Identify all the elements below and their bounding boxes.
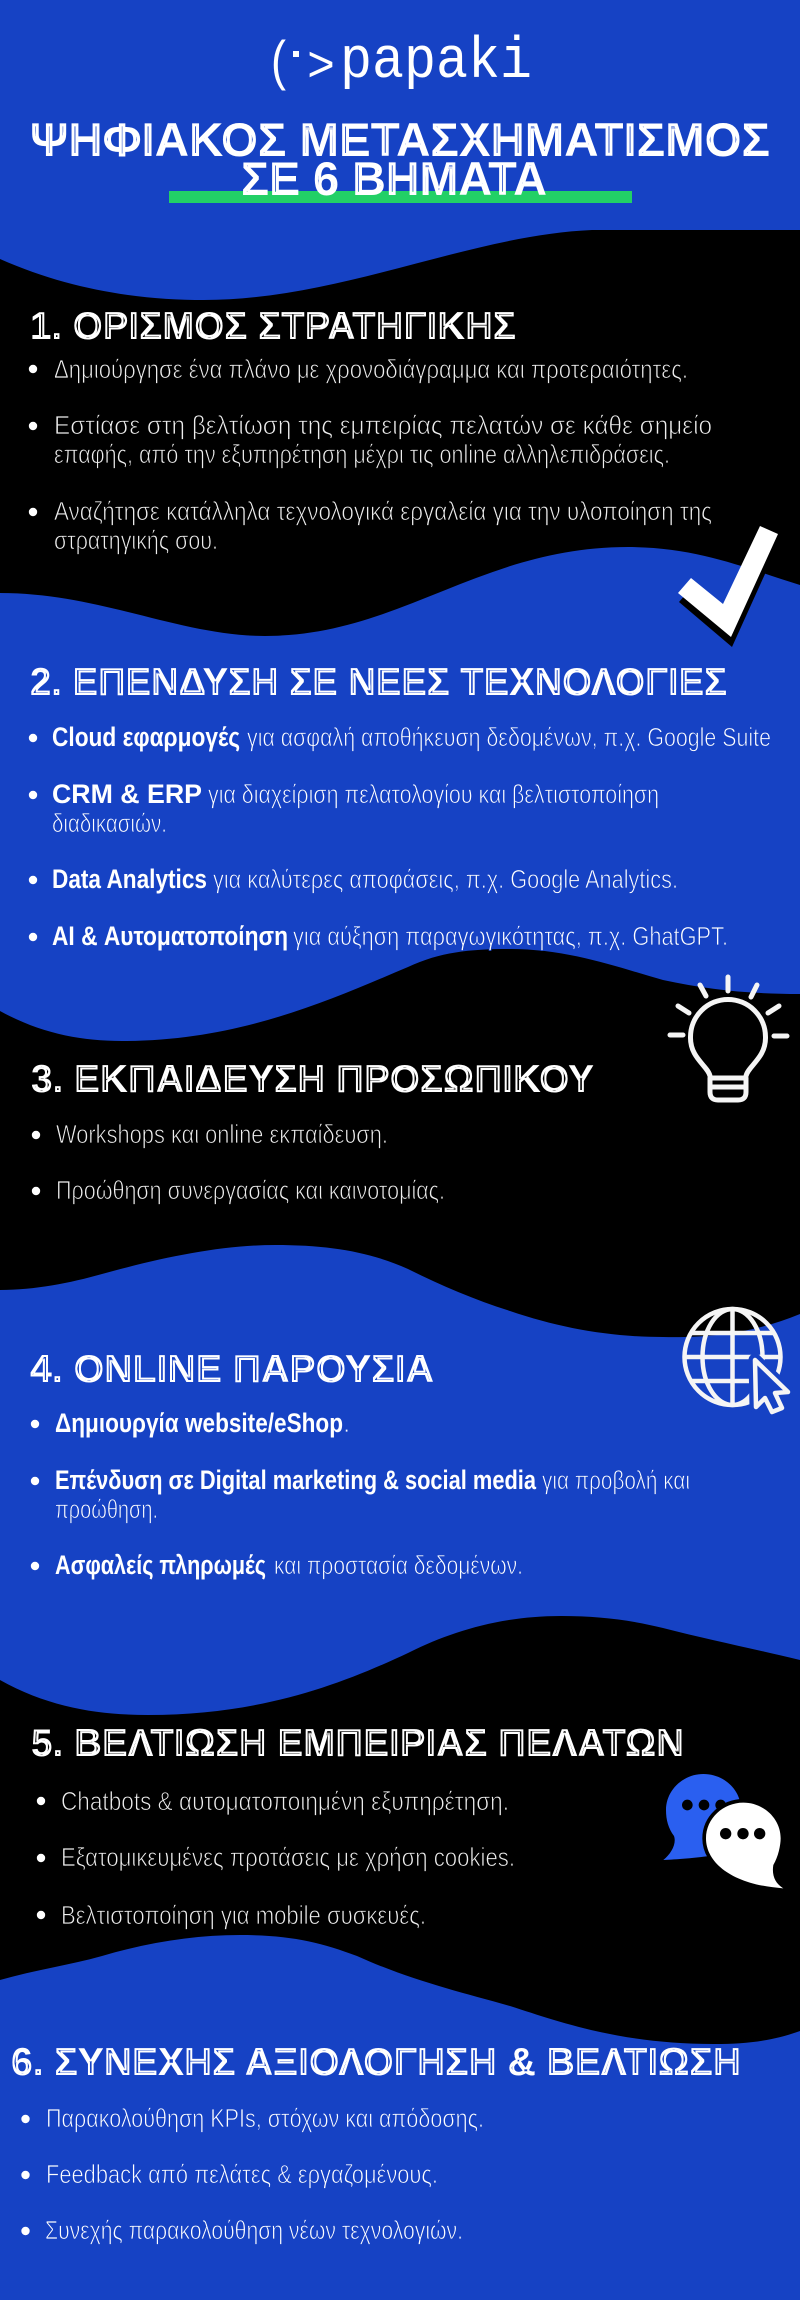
bullet list: step 2 bbox=[29, 722, 771, 951]
bullet list: step 2: για διαχείριση πελατολογίου και βελτιστοποίηση bbox=[208, 779, 659, 809]
bullet list: step 3: Προώθηση συνεργασίας και καινοτομίας. bbox=[56, 1175, 445, 1205]
bullet list: step 2: Cloud εφαρμογές bbox=[52, 722, 240, 752]
bullet list: step 1: στρατηγικής σου. bbox=[54, 525, 218, 555]
bullet list: step 4: Ασφαλείς πληρωμές bbox=[55, 1550, 266, 1580]
bullet list: step 1: επαφής, από την εξυπηρέτηση μέχρι τις online αλληλεπιδράσεις. bbox=[54, 439, 670, 469]
bullet list: step 5 bbox=[37, 1786, 515, 1930]
bullet list: step 4: προώθηση. bbox=[55, 1494, 158, 1524]
heading: step 1: 1. ΟΡΙΣΜΟΣ ΣΤΡΑΤΗΓΙΚΗΣ bbox=[30, 305, 516, 348]
logo: papaki bbox=[271, 29, 532, 97]
heading: step 3: 3. ΕΚΠΑΙΔΕΥΣΗ ΠΡΟΣΩΠΙΚΟΥ bbox=[31, 1058, 594, 1101]
bullet list: step 2: CRM & ERP bbox=[52, 779, 202, 809]
bullet list: step 2: AI & Αυτοματοποίηση bbox=[52, 921, 288, 951]
bullet list: step 4: Επένδυση σε Digital marketing & social media bbox=[55, 1465, 537, 1495]
icon: light bulb bbox=[670, 977, 787, 1100]
icon: chat bubbles bbox=[663, 1774, 783, 1888]
bullet list: step 2: για αύξηση παραγωγικότητας, π.χ. GhatGPT. bbox=[293, 921, 728, 951]
bullet list: step 1 bbox=[29, 354, 712, 555]
bullet list: step 4: . bbox=[343, 1408, 350, 1438]
bullet list: step 6: Feedback από πελάτες & εργαζομένους. bbox=[46, 2159, 438, 2189]
title with green underline bbox=[30, 114, 770, 206]
bullet list: step 5: Chatbots & αυτοματοποιημένη εξυπηρέτηση. bbox=[61, 1786, 509, 1816]
panel: step 5 customer experience bbox=[31, 1722, 684, 1930]
bullet list: step 2: για καλύτερες αποφάσεις, π.χ. Google Analytics. bbox=[213, 864, 678, 894]
heading: step 2: 2. ΕΠΕΝΔΥΣΗ ΣΕ ΝΕΕΣ ΤΕΧΝΟΛΟΓΙΕΣ bbox=[30, 661, 727, 704]
heading: step 5: 5. ΒΕΛΤΙΩΣΗ ΕΜΠΕΙΡΙΑΣ ΠΕΛΑΤΩΝ bbox=[31, 1722, 684, 1765]
black wave band: step 1 bbox=[0, 230, 800, 636]
bullet list: step 6 bbox=[21, 2103, 484, 2245]
bullet list: step 5: Βελτιστοποίηση για mobile συσκευές. bbox=[61, 1900, 426, 1930]
title with green underline: ΣΕ 6 ΒΗΜΑΤΑ bbox=[241, 153, 547, 206]
bullet list: step 1: Εστίασε στη βελτίωση της εμπειρίας πελατών σε κάθε σημείο bbox=[54, 410, 712, 440]
bullet list: step 6: Παρακολούθηση KPIs, στόχων και απόδοσης. bbox=[46, 2103, 484, 2133]
bullet list: step 1: Δημιούργησε ένα πλάνο με χρονοδιάγραμμα και προτεραιότητες. bbox=[54, 354, 688, 384]
panel: step 2 technologies bbox=[29, 661, 771, 951]
panel: step 6 continuous evaluation bbox=[11, 2041, 741, 2245]
heading: step 6: 6. ΣΥΝΕΧΗΣ ΑΞΙΟΛΟΓΗΣΗ & ΒΕΛΤΙΩΣΗ bbox=[11, 2041, 741, 2084]
icon: globe with cursor bbox=[684, 1309, 788, 1412]
bullet list: step 4: και προστασία δεδομένων. bbox=[274, 1550, 523, 1580]
bullet list: step 4: Δημιουργία website/eShop bbox=[55, 1408, 343, 1438]
heading: step 4: 4. ONLINE ΠΑΡΟΥΣΙΑ bbox=[30, 1348, 434, 1391]
black wave band: step 5 bbox=[0, 1616, 800, 2044]
bullet list: step 1: Αναζήτησε κατάλληλα τεχνολογικά εργαλεία για την υλοποίηση της bbox=[54, 496, 712, 526]
icon: check mark bbox=[678, 526, 779, 647]
logo: papaki: ( bbox=[271, 29, 286, 91]
logo: papaki: papaki bbox=[340, 30, 532, 95]
bullet list: step 4 bbox=[31, 1408, 690, 1580]
bullet list: step 2: Data Analytics bbox=[52, 864, 207, 894]
logo: papaki: > bbox=[307, 40, 335, 97]
bullet list: step 3 bbox=[32, 1119, 445, 1205]
black wave band: step 3 bbox=[0, 949, 800, 1337]
bullet list: step 4: για προβολή και bbox=[542, 1465, 690, 1495]
panel: step 4 online presence bbox=[30, 1348, 690, 1580]
bullet list: step 5: Εξατομικευμένες προτάσεις με χρήση cookies. bbox=[61, 1842, 515, 1872]
bullet list: step 2: διαδικασιών. bbox=[52, 808, 167, 838]
panel: step 3 training bbox=[31, 1058, 594, 1205]
title with green underline: ΨΗΦΙΑΚΟΣ ΜΕΤΑΣΧΗΜΑΤΙΣΜΟΣ bbox=[30, 114, 770, 167]
panel: step 1 strategy bbox=[29, 305, 712, 555]
bullet list: step 3: Workshops και online εκπαίδευση. bbox=[56, 1119, 388, 1149]
bullet list: step 6: Συνεχής παρακολούθηση νέων τεχνολογιών. bbox=[45, 2215, 463, 2245]
